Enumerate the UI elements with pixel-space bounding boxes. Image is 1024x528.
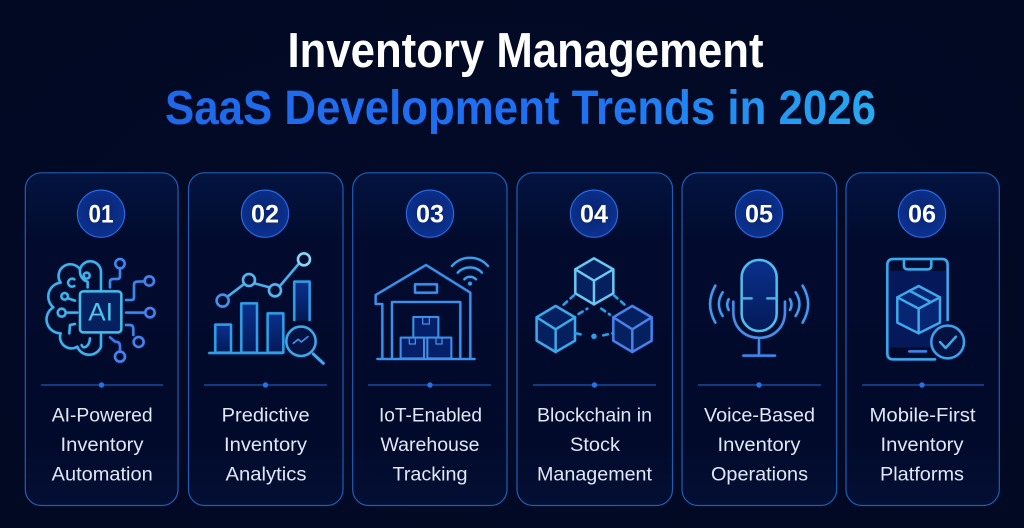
- label 05: Inventory: [718, 434, 801, 456]
- icon: IoT warehouse: [376, 258, 488, 359]
- label 02: [222, 405, 310, 485]
- icon: AI brain: [47, 259, 155, 362]
- badge 02: [241, 190, 289, 237]
- title: [165, 24, 876, 135]
- label 01: Inventory: [60, 434, 144, 456]
- icon: blockchain cubes: [537, 258, 652, 352]
- label 02: Predictive: [222, 405, 310, 427]
- panel: card 03: [353, 173, 507, 506]
- label 01: AI-Powered: [52, 405, 153, 427]
- panel: card 06: [846, 173, 999, 506]
- label 04: Management: [537, 463, 653, 485]
- label 05: Voice-Based: [704, 405, 815, 427]
- panel: card 02: [188, 173, 343, 506]
- icon: AI brain: AI: [88, 299, 113, 327]
- label 06: Mobile-First: [870, 405, 976, 427]
- panel: card 01: [25, 173, 178, 506]
- icon: mobile with parcel: [887, 259, 964, 359]
- label 05: Operations: [711, 463, 808, 485]
- label 04: Stock: [570, 434, 620, 456]
- icon: microphone: [710, 260, 808, 356]
- label 03: [379, 405, 482, 485]
- label 06: [870, 405, 976, 485]
- title line 1: Inventory Management: [288, 24, 764, 78]
- label 06: Inventory: [880, 434, 964, 456]
- label 05: [704, 405, 815, 485]
- panel: card 04: [517, 173, 672, 506]
- badge 04: 04: [580, 201, 608, 229]
- panel: card 05: [682, 173, 837, 506]
- label 01: Automation: [52, 463, 153, 485]
- label 03: Tracking: [392, 463, 468, 485]
- badge 05: 05: [745, 201, 773, 229]
- label 04: Blockchain in: [537, 405, 652, 427]
- label 04: [537, 405, 653, 485]
- label 03: IoT-Enabled: [379, 405, 482, 427]
- label 01: [52, 405, 153, 485]
- label 03: Warehouse: [380, 434, 480, 456]
- label 02: Analytics: [226, 463, 307, 485]
- badge 01: [77, 190, 125, 237]
- title line 2: SaaS Development Trends in 2026: [165, 82, 876, 135]
- label 02: Inventory: [224, 434, 307, 456]
- icon: predictive chart: [209, 253, 323, 363]
- badge 05: [735, 190, 783, 237]
- label 06: Platforms: [880, 463, 964, 485]
- badge 03: [406, 190, 454, 237]
- badge 06: 06: [908, 201, 936, 229]
- badge 01: 01: [88, 201, 114, 229]
- badge 02: 02: [251, 201, 279, 229]
- badge 04: [570, 190, 618, 237]
- badge 03: 03: [416, 201, 444, 229]
- badge 06: [898, 190, 946, 237]
